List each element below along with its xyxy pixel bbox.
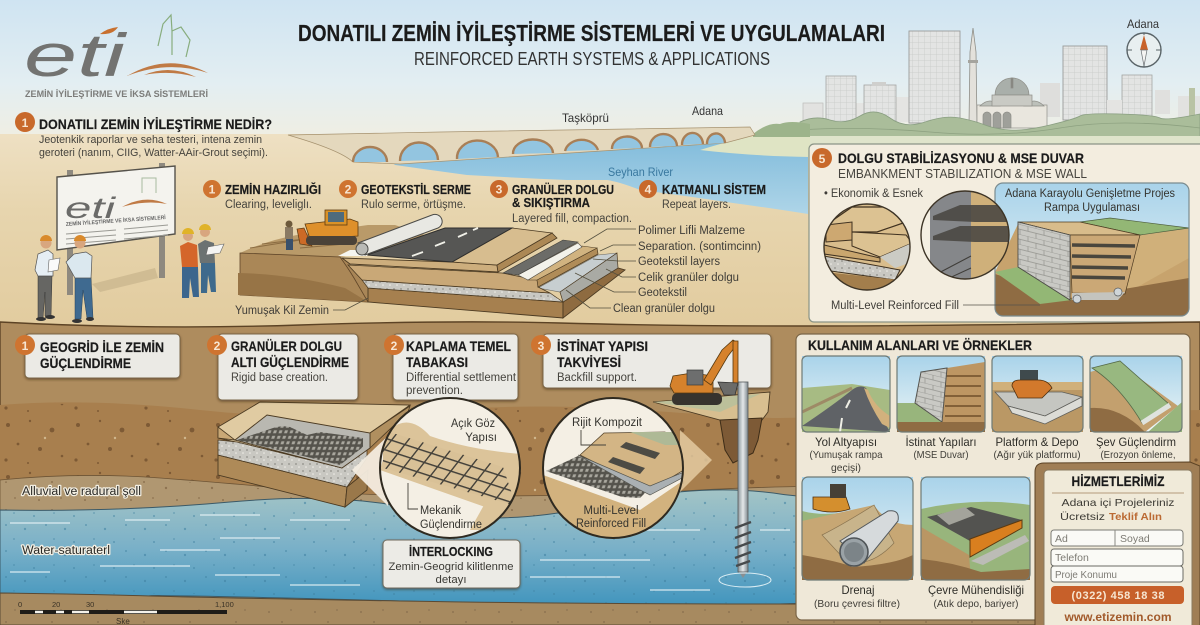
thumbnail: platform: Platform & Depo <box>996 435 1079 449</box>
scale bar: 0 <box>18 600 22 609</box>
card: retaining structure: TAKVİYESİ <box>557 355 621 370</box>
section 1: what is it: 1 <box>22 116 29 130</box>
card: granular sub-base: GRANÜLER DOLGU <box>231 339 342 354</box>
geotextile roll <box>358 214 442 255</box>
callout wedge: composite to pile <box>680 430 712 492</box>
gravel layer <box>362 280 563 302</box>
layer callout lines <box>333 229 636 310</box>
phone button: (0322) 458 18 38 <box>1072 590 1164 602</box>
detail circle: rigid composite <box>543 398 684 540</box>
step 4: KATMANLI SİSTEM <box>662 182 766 197</box>
icon: minaret <box>969 28 977 125</box>
bulldozer <box>297 210 358 246</box>
logo: eti <box>24 15 208 100</box>
thumbnail: road <box>802 356 890 474</box>
panel: services: Adana içi Projeleriniz <box>1062 497 1174 509</box>
thumbnail: drainage <box>802 477 913 610</box>
tree band <box>800 112 1200 146</box>
embankment cross-section <box>238 210 625 318</box>
MSE wall illustration <box>995 183 1189 316</box>
compass <box>1127 17 1161 67</box>
detail circle: open-mesh geogrid: Güçlendirme <box>420 519 482 531</box>
thumbnail: environmental: Çevre Mühendisliği <box>928 583 1024 597</box>
layer labels: Geotekstil <box>638 287 687 299</box>
river bank green <box>700 137 810 157</box>
card: geogrid <box>15 334 180 378</box>
panel 5: embankment stabilization: EMBANKMENT STABILIZATION & MSE WALL <box>838 166 1087 181</box>
icon: mosque <box>977 78 1047 128</box>
logo: eti: ZEMİN İYİLEŞTİRME VE İKSA SİSTEMLERİ <box>25 89 208 100</box>
step 4: 4 <box>645 182 652 196</box>
step 3: GRANÜLER DOLGU <box>512 182 614 197</box>
step 3: 3 <box>496 182 503 196</box>
scale bar: 1,100 <box>215 600 234 609</box>
card: retaining structure: İSTİNAT YAPISI <box>557 339 648 354</box>
left soil mound <box>240 225 440 257</box>
sand slab top <box>218 402 410 468</box>
step 4: Repeat layers. <box>662 199 731 211</box>
tan lower layer <box>348 254 598 293</box>
card: granular sub-base: ALTI GÜÇLENDİRME <box>231 355 349 370</box>
step 3: & SIKIŞTIRMA <box>512 196 590 210</box>
scale bar: 20 <box>52 600 60 609</box>
step 3 <box>490 180 632 225</box>
detail circle: open-mesh geogrid: Açık Göz <box>451 418 495 430</box>
panel: applications: KULLANIM ALANLARI VE ÖRNEKLER <box>808 337 1032 353</box>
detail circle: rigid composite: Multi-Level <box>584 505 638 517</box>
detail circle: open-mesh geogrid: Mekanik <box>420 505 461 517</box>
panel 5: embankment stabilization: • Ekonomik & Esnek <box>824 188 923 200</box>
detail circle: layers <box>823 203 911 291</box>
card: interlocking <box>383 540 520 588</box>
phone button <box>1051 586 1184 604</box>
label: Seyhan River: Seyhan River <box>608 165 673 179</box>
thumbnail: environmental: (Atık depo, bariyer) <box>934 598 1018 610</box>
step 1 <box>203 180 321 211</box>
section 1: what is it: geroteri (nanım, CIIG, Watter-AAir-Grout seçimi). <box>39 147 268 159</box>
speckles <box>0 404 1200 505</box>
step 1: 1 <box>209 182 216 196</box>
step 2: Rulo serme, örtüşme. <box>361 199 466 211</box>
detail circle: rigid composite: Rijit Kompozit <box>572 417 643 429</box>
layer labels: Separation. (sontimcinn) <box>638 241 761 253</box>
panel: services: Ücretsiz <box>1060 511 1105 523</box>
detail circle: wall grid <box>921 190 1011 280</box>
gravel <box>218 440 367 487</box>
layer labels: Polimer Lifli Malzeme <box>638 225 745 237</box>
card: geogrid: GEOGRİD İLE ZEMİN <box>40 340 164 355</box>
screw pile <box>719 382 771 587</box>
step 4 <box>639 180 766 211</box>
scale bar <box>18 600 234 625</box>
bridge Taşköprü <box>288 127 755 164</box>
billboard <box>57 163 175 295</box>
thumbnail: road: geçişi) <box>831 462 861 474</box>
section 1: what is it <box>15 112 272 159</box>
card: pavement base: prevention. <box>406 385 463 397</box>
title <box>298 20 885 69</box>
website: www.etizemin.com <box>1064 610 1172 624</box>
thumbnail: platform: (Ağır yük platformu) <box>994 449 1080 461</box>
card: pavement base: 2 <box>391 339 398 353</box>
thumbnail: retaining wall: (MSE Duvar) <box>914 449 968 461</box>
step 1: ZEMİN HAZIRLIĞI <box>225 182 321 197</box>
embankment base fill <box>240 253 625 318</box>
billboard: ZEMİN İYİLEŞTİRME VE İKSA SİSTEMLERİ <box>66 214 166 228</box>
bottom soil <box>0 593 1200 625</box>
card: granular sub-base: Rigid base creation. <box>231 372 328 384</box>
thumbnail: slope <box>1090 356 1182 461</box>
form fields <box>1051 530 1183 582</box>
scale bar: 30 <box>86 600 94 609</box>
panel 5: embankment stabilization: Multi-Level Reinforced Fill <box>831 300 959 312</box>
form fields: Soyad <box>1120 533 1150 545</box>
form fields: Telefon <box>1055 552 1089 564</box>
label: alluvial soil: Alluvial ve radural şoll <box>22 486 141 498</box>
dark geotextile strip <box>503 240 578 275</box>
label: Taşköprü: Taşköprü <box>562 111 609 125</box>
lower ground: subsoil <box>0 322 1200 625</box>
card: pavement base <box>384 334 518 400</box>
bushes near bridge <box>753 122 810 137</box>
skyline of Adana <box>800 28 1200 146</box>
panel 5: embankment stabilization: DOLGU STABİLİZASYONU & MSE DUVAR <box>838 150 1084 166</box>
thumbnail: environmental <box>921 477 1030 610</box>
white geotextile strip <box>518 243 582 280</box>
thumbnail: slope: Şev Güçlendirm <box>1096 435 1176 449</box>
small worker <box>285 220 293 250</box>
geogrid mesh <box>237 426 363 465</box>
step 2: GEOTEKSTİL SERME <box>361 182 471 197</box>
workers group right <box>180 224 224 298</box>
geogrid soil block <box>218 402 410 507</box>
label: Adana: Adana <box>692 104 723 118</box>
card: pavement base: Differential settlement <box>406 372 517 384</box>
gravel soil layer <box>0 402 1200 520</box>
panel 5: embankment stabilization <box>809 144 1200 322</box>
step 2 <box>339 180 471 211</box>
thumbnail: drainage: (Boru çevresi filtre) <box>814 598 900 610</box>
thumbnail: retaining wall <box>897 356 985 461</box>
panel: services: HİZMETLERİMİZ <box>1072 473 1165 489</box>
card: granular sub-base <box>207 334 358 400</box>
detail circle: open-mesh geogrid: Yapısı <box>465 432 497 444</box>
thumbnail: platform <box>992 356 1083 461</box>
title: DONATILI ZEMİN İYİLEŞTİRME SİSTEMLERİ VE UYGULAMALARI <box>298 20 885 46</box>
excavation pit <box>653 392 770 463</box>
MSE wall illustration: Rampa Uygulaması <box>1044 202 1140 214</box>
card: interlocking: İNTERLOCKING <box>409 544 493 559</box>
card: retaining structure: Backfill support. <box>557 372 637 384</box>
card: granular sub-base: 2 <box>214 339 221 353</box>
card: retaining structure <box>531 334 771 388</box>
excavator <box>670 340 738 405</box>
compass: Adana <box>1127 17 1159 31</box>
form fields: Ad <box>1055 533 1068 545</box>
river <box>390 143 808 214</box>
panel 5: embankment stabilization: 5 <box>819 152 826 166</box>
MSE wall illustration: Adana Karayolu Genişletme Projes <box>1005 188 1175 200</box>
asphalt road <box>367 228 512 262</box>
step 1: Clearing, leveliglı. <box>225 199 312 211</box>
label: water saturated: Water-saturaterl <box>22 545 110 557</box>
form fields: Proje Konumu <box>1055 569 1117 581</box>
billboard: eti <box>65 192 117 225</box>
detail circle: open-mesh geogrid <box>380 398 522 538</box>
recess walls <box>235 415 370 468</box>
workers group left <box>35 235 94 323</box>
thumbnail: retaining wall: İstinat Yapıları <box>906 435 976 449</box>
background: sky <box>0 0 1200 140</box>
panel: services: Teklif Alın <box>1109 511 1162 523</box>
thumbnail: road: (Yumuşak rampa <box>810 449 883 461</box>
section 1: what is it: DONATILI ZEMİN İYİLEŞTİRME NEDİR? <box>39 116 272 132</box>
background: upper sand ground <box>0 134 1200 326</box>
subtitle: REINFORCED EARTH SYSTEMS & APPLICATIONS <box>414 48 770 69</box>
layer labels <box>613 225 761 315</box>
logo: eti: eti <box>24 22 128 89</box>
detail circle: rigid composite: Reinforced Fill <box>576 518 646 530</box>
thumbnail: drainage: Drenaj <box>842 583 874 597</box>
steps row <box>203 180 766 225</box>
bottom soil <box>218 455 347 507</box>
card: pavement base: TABAKASI <box>406 355 468 370</box>
water-saturated layer <box>0 490 1200 608</box>
panel: applications <box>796 334 1190 620</box>
panel: services <box>1035 462 1200 625</box>
card: geogrid: 1 <box>22 339 29 353</box>
card: retaining structure: 3 <box>538 339 545 353</box>
alluvial layer <box>0 475 1200 530</box>
upper tan strip <box>342 258 498 272</box>
bottom brown layer <box>368 288 563 318</box>
card: geogrid: GÜÇLENDİRME <box>40 356 131 371</box>
step 2: 2 <box>345 182 352 196</box>
step 3: Layered fill, compaction. <box>512 213 632 225</box>
layer labels: Geotekstil layers <box>638 256 720 268</box>
callout wedge: block to grid detail <box>352 432 392 506</box>
layer labels: Celik granüler dolgu <box>638 272 739 284</box>
layer labels: Clean granüler dolgu <box>613 303 715 315</box>
thumbnail: road: Yol Altyapısı <box>815 435 877 449</box>
thumbnail: slope: (Erozyon önleme, <box>1100 449 1176 461</box>
label: soft clay: Yumuşak Kil Zemin <box>235 305 329 317</box>
section 1: what is it: Jeotenkik raporlar ve seha testeri, intena zemin <box>39 134 262 146</box>
card: interlocking: Zemin-Geogrid kilitlenme <box>388 561 514 573</box>
card: interlocking: detayı <box>436 574 466 586</box>
card: pavement base: KAPLAMA TEMEL <box>406 339 511 354</box>
